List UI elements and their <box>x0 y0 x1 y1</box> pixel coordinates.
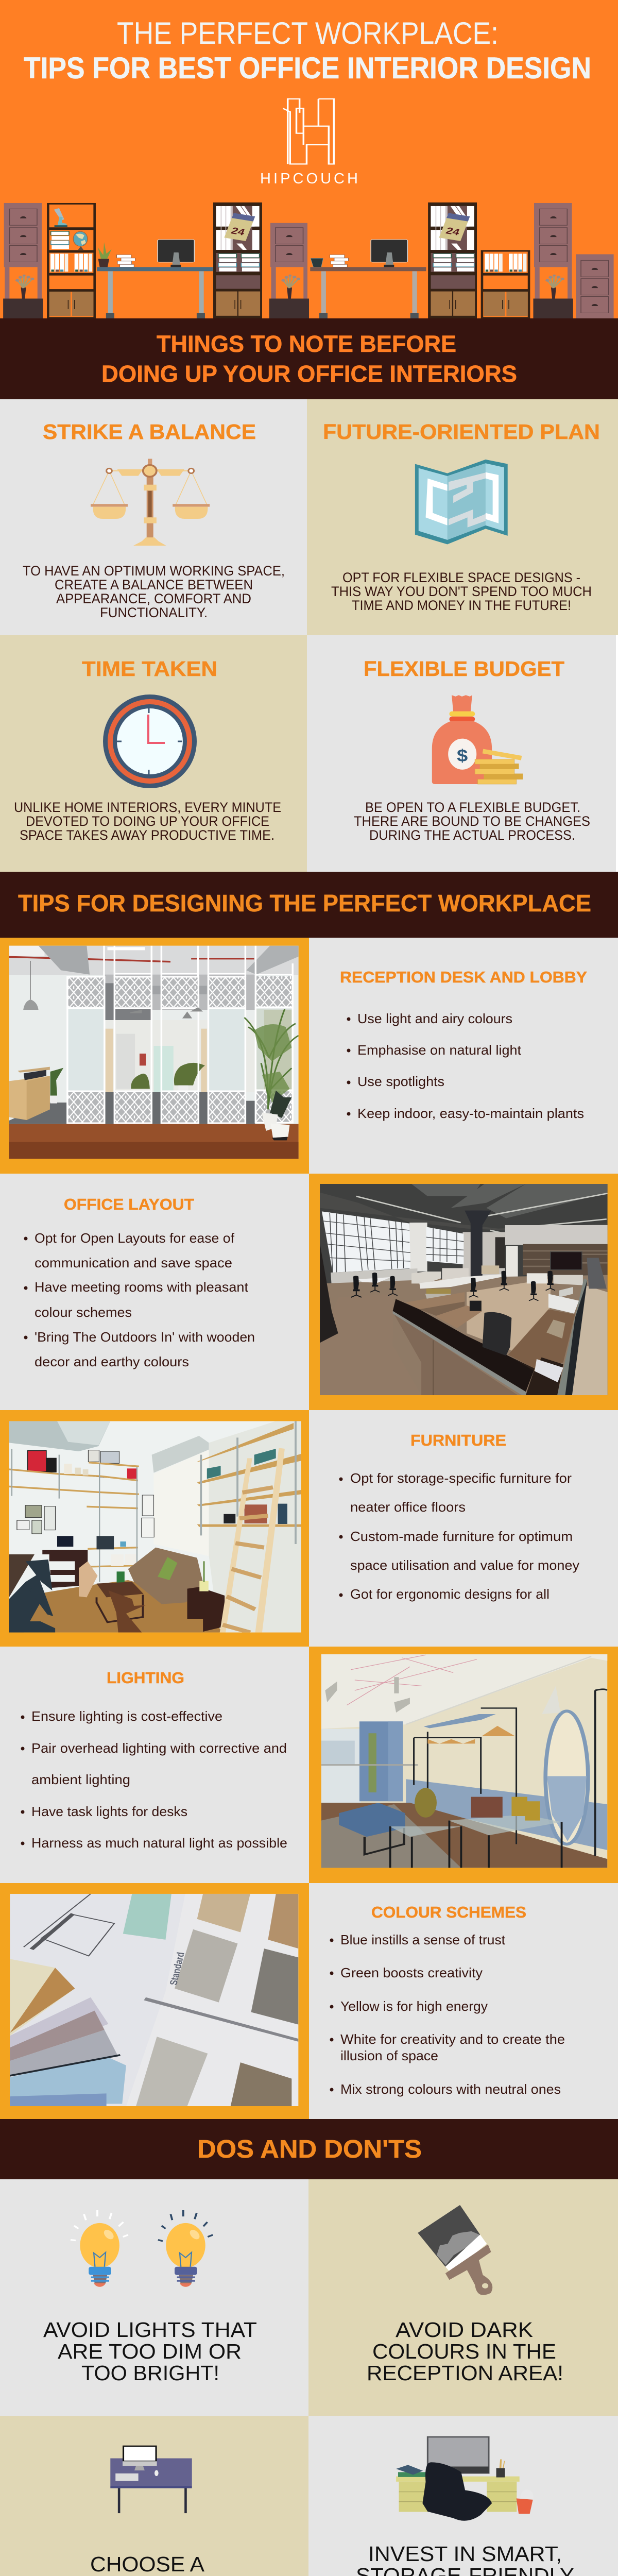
panel: furniture <box>0 1410 618 1647</box>
bullet list: Opt for Open Layouts for ease of <box>35 1230 235 1246</box>
bullet list: ambient lighting <box>31 1772 130 1787</box>
text block: OPT FOR FLEXIBLE SPACE DESIGNS - <box>342 570 580 585</box>
bullet list: Use spotlights <box>357 1074 444 1089</box>
text block <box>356 2542 574 2576</box>
bullet list <box>347 1011 584 1121</box>
heading band: dos and don'ts <box>0 2119 618 2179</box>
bullet list: Blue instills a sense of trust <box>340 1932 506 1947</box>
bullet list: Use light and airy colours <box>357 1011 512 1026</box>
illustration: office furniture scene <box>3 203 614 318</box>
text block: DEVOTED TO DOING UP YOUR OFFICE <box>26 814 269 829</box>
bullet list: Ensure lighting is cost-effective <box>31 1708 222 1724</box>
text block: DURING THE ACTUAL PROCESS. <box>369 827 575 843</box>
bookshelf with calendar <box>214 203 261 318</box>
icon: two light bulbs <box>71 2210 213 2287</box>
text block: THERE ARE BOUND TO BE CHANGES <box>354 814 590 829</box>
photo: lighting <box>321 1654 607 1868</box>
bullet list: Emphasise on natural light <box>357 1042 522 1058</box>
icon: money bag: $ <box>457 745 468 765</box>
bullet list <box>24 1230 255 1369</box>
heading band: tips <box>0 872 618 938</box>
bullet list: neater office floors <box>350 1499 466 1515</box>
header background <box>0 0 618 318</box>
panel: lighting <box>0 1647 618 1883</box>
bullet list <box>330 1932 565 2097</box>
books on left desk <box>117 255 135 267</box>
bullet list: space utilisation and value for money <box>350 1557 579 1573</box>
books on right desk <box>330 255 349 267</box>
monitor left <box>158 240 194 267</box>
logo: Hipcouch: HIPCOUCH <box>260 171 358 187</box>
bullet list: Have task lights for desks <box>31 1804 187 1819</box>
icon: money bag <box>432 695 523 784</box>
bookshelf with calendar right: 24 <box>444 225 461 238</box>
text block <box>14 800 281 843</box>
heading band: things to note <box>0 318 618 399</box>
text block <box>367 2318 563 2385</box>
heading: TIME TAKEN <box>82 657 217 681</box>
bullet list: Mix strong colours with neutral ones <box>340 2081 561 2097</box>
photo: open office <box>320 1184 608 1395</box>
text block: TO HAVE AN OPTIMUM WORKING SPACE, <box>23 563 285 579</box>
bullet list: Opt for storage-specific furniture for <box>350 1470 572 1486</box>
monitor right <box>371 240 407 267</box>
heading: STRIKE A BALANCE <box>43 420 256 444</box>
text block <box>331 570 592 613</box>
bullet list: White for creativity and to create the <box>340 2031 565 2047</box>
text block: ARE TOO DIM OR <box>58 2340 242 2363</box>
icon: map <box>415 460 508 545</box>
photo: furniture <box>9 1421 301 1633</box>
heading band: dos and don'ts: DOS AND DON'TS <box>197 2136 422 2163</box>
text block: TOO BRIGHT! <box>81 2361 219 2385</box>
photo: colour samples <box>10 1894 298 2106</box>
icon: scales <box>91 459 210 546</box>
text block: SPACE TAKES AWAY PRODUCTIVE TIME. <box>20 827 274 843</box>
bullet list: Yellow is for high energy <box>340 1998 488 2014</box>
panel: strike a balance <box>0 399 307 635</box>
bullet list: communication and save space <box>35 1255 232 1270</box>
plant on left desk <box>98 242 112 267</box>
cabinet: left tall <box>3 203 43 318</box>
panel: avoid lights <box>0 2179 308 2416</box>
text block: CREATE A BALANCE BETWEEN <box>55 577 253 592</box>
heading: FURNITURE <box>410 1431 506 1449</box>
icon: paint brush <box>418 2205 492 2295</box>
cabinet: right tall <box>533 203 573 318</box>
bullet list: decor and earthy colours <box>35 1354 189 1369</box>
text block: BE OPEN TO A FLEXIBLE BUDGET. <box>365 800 580 815</box>
bullet list <box>339 1470 579 1602</box>
bullet list: Green boosts creativity <box>340 1965 483 1980</box>
panel: future-oriented plan <box>307 399 618 635</box>
text block <box>354 800 590 843</box>
text block: APPEARANCE, COMFORT AND <box>56 591 251 606</box>
bookshelf short <box>482 251 529 318</box>
heading: OFFICE LAYOUT <box>64 1195 194 1213</box>
photo: reception <box>9 946 299 1159</box>
bullet list: colour schemes <box>35 1304 132 1320</box>
icon: desk <box>110 2446 192 2513</box>
heading band: things to note: DOING UP YOUR OFFICE INTERIORS <box>101 361 517 387</box>
panel: smart furniture <box>308 2416 618 2576</box>
bullet list: Custom-made furniture for optimum <box>350 1529 573 1544</box>
text block: CHOOSE A <box>90 2552 205 2576</box>
bullet list: Have meeting rooms with pleasant <box>35 1279 249 1295</box>
bullet list: 'Bring The Outdoors In' with wooden <box>35 1329 255 1345</box>
text block: AVOID DARK <box>396 2318 533 2342</box>
heading band: tips: TIPS FOR DESIGNING THE PERFECT WORKPLACE <box>18 890 591 917</box>
panel: colour schemes <box>0 1883 618 2119</box>
bullet list: Pair overhead lighting with corrective and <box>31 1740 287 1756</box>
heading: LIGHTING <box>107 1669 184 1687</box>
panel: office layout <box>0 1174 618 1410</box>
heading: RECEPTION DESK AND LOBBY <box>340 968 587 986</box>
heading: FUTURE-ORIENTED PLAN <box>323 420 600 444</box>
title: THE PERFECT WORKPLACE: <box>117 16 499 50</box>
text block <box>23 563 285 620</box>
bookshelf with microscope and globe <box>48 204 95 318</box>
text block: AVOID LIGHTS THAT <box>43 2318 257 2342</box>
right desk plant pot <box>311 258 323 267</box>
text block: THIS WAY YOU DON'T SPEND TOO MUCH <box>331 584 592 599</box>
heading band: things to note: THINGS TO NOTE BEFORE <box>157 331 456 357</box>
heading: COLOUR SCHEMES <box>371 1903 526 1921</box>
panel: flexible budget <box>307 635 616 872</box>
text block <box>43 2318 257 2385</box>
desk: brown <box>310 267 426 318</box>
icon: clock <box>103 694 197 788</box>
text block: FUNCTIONALITY. <box>100 605 208 620</box>
text block: UNLIKE HOME INTERIORS, EVERY MINUTE <box>14 800 281 815</box>
bullet list: Got for ergonomic designs for all <box>350 1586 550 1602</box>
logo: Hipcouch <box>260 99 358 187</box>
cabinet: middle <box>269 223 309 318</box>
title <box>24 16 591 85</box>
text block: INVEST IN SMART, <box>368 2542 562 2566</box>
photo: colour samples: Standard <box>167 1952 186 1986</box>
cabinet: far right <box>576 254 614 318</box>
bullet list: Keep indoor, easy-to-maintain plants <box>357 1106 584 1121</box>
icon: desk with chair <box>396 2437 534 2521</box>
bookshelf with calendar: 24 <box>230 225 247 238</box>
panel: avoid dark colours <box>308 2179 618 2416</box>
bullet list <box>21 1708 287 1851</box>
panel: flexible layout <box>0 2416 308 2576</box>
text block: TIME AND MONEY IN THE FUTURE! <box>352 598 571 613</box>
bullet list: illusion of space <box>340 2048 438 2063</box>
heading: FLEXIBLE BUDGET <box>364 657 564 681</box>
panel: reception desk and lobby <box>0 938 618 1174</box>
bookshelf with calendar right <box>429 203 476 318</box>
text block: RECEPTION AREA! <box>367 2361 563 2385</box>
bullet list: Harness as much natural light as possible <box>31 1835 287 1851</box>
text block <box>54 2552 248 2576</box>
text block: COLOURS IN THE <box>372 2340 556 2363</box>
panel: time taken <box>0 635 307 872</box>
desk: blue <box>97 267 213 318</box>
